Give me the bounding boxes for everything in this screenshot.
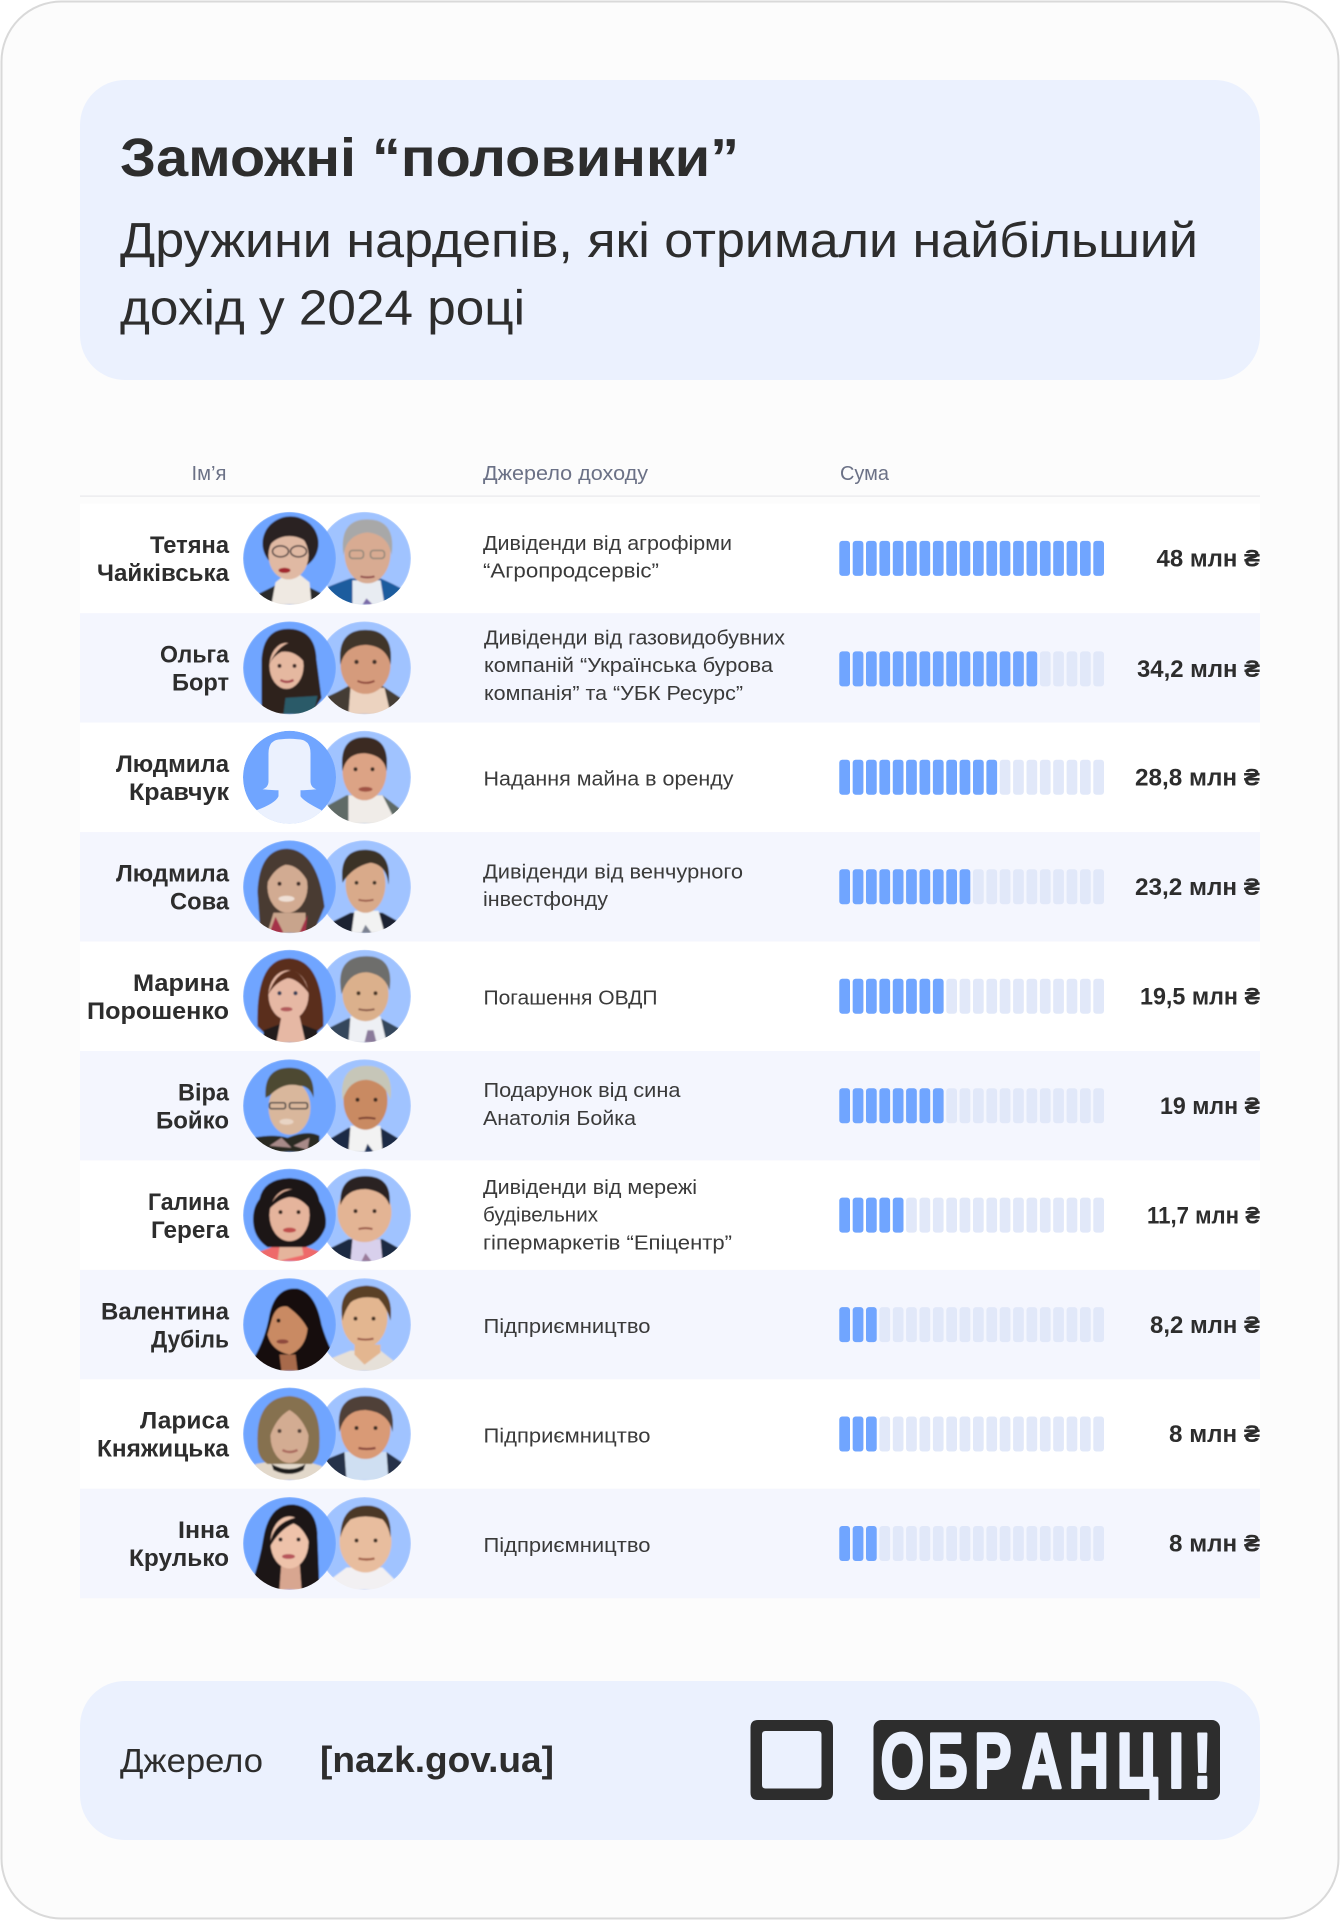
name [101,1298,229,1353]
name: Крулько [129,1545,229,1572]
name [156,1079,229,1134]
income source: “Агропродсервіс” [483,560,659,583]
portrait: wife [243,1169,336,1262]
portrait: silhouette [243,731,336,827]
portrait: wife [243,950,336,1043]
amount: 19 млн ₴ [1160,1093,1260,1120]
name [97,1408,229,1463]
income source: Дивіденди від агрофірми [483,532,732,555]
bar [839,1198,1104,1233]
row: Галина Герега [150,1168,1260,1262]
amount: 8,2 млн ₴ [1150,1312,1260,1339]
name: Герега [151,1217,229,1244]
name: Княжицька [97,1436,229,1463]
amount: 34,2 млн ₴ [1137,656,1260,683]
table header [80,463,1260,497]
income source: Дивіденди від венчурного [483,860,743,883]
income source: Надання майна в оренду [484,768,734,791]
portrait: husband [318,1497,411,1590]
bar [839,651,1104,686]
portrait: wife [243,1278,336,1371]
row: Інна Крулько [130,1497,1260,1590]
income source: компаній “Українська бурова [484,654,774,677]
name [97,532,229,587]
bar [839,1088,1104,1123]
table header: Ім’я [192,463,226,485]
bar [839,1307,1104,1342]
portrait: husband [318,1388,411,1480]
name [87,970,229,1025]
portrait: husband [318,1169,411,1262]
income source: компанія” та “УБК Ресурс” [484,682,743,705]
name: Борт [172,670,229,697]
portrait: husband [318,1278,411,1371]
name [116,751,230,806]
amount: 23,2 млн ₴ [1135,874,1260,901]
income source: Підприємництво [484,1534,650,1557]
table header: Сума [840,463,890,485]
portrait: wife [243,840,336,933]
portrait: husband [318,1059,411,1152]
table header: Джерело доходу [483,463,648,485]
portrait: husband [318,621,411,714]
name: Порошенко [87,998,229,1025]
row: Людмила Кравчук [116,730,1260,824]
income source: Дивіденди від мережі [483,1176,697,1199]
amount: 11,7 млн ₴ [1147,1202,1260,1229]
income source: Підприємництво [484,1315,650,1338]
name: Сова [170,888,229,915]
bar [839,869,1104,904]
income source [483,1176,732,1254]
icon: logo checkbox [750,1720,833,1800]
income source: Підприємництво [484,1424,650,1447]
name: Інна [178,1517,229,1544]
name [116,860,229,916]
income source: Анатолія Бойка [483,1107,637,1130]
income source [484,626,786,705]
amount: 28,8 млн ₴ [1135,764,1260,791]
title: Заможні “половинки” [120,128,739,188]
source label: Джерело [120,1742,263,1779]
name: Кравчук [129,779,230,806]
income source [483,860,743,911]
bar [839,1416,1104,1452]
name: Марина [133,970,229,997]
amount: 8 млн ₴ [1169,1421,1260,1448]
income source: Подарунок від сина [484,1079,681,1102]
amount: 48 млн ₴ [1156,546,1260,573]
portrait: husband [318,950,411,1043]
row: Марина Порошенко [88,950,1260,1043]
row: Лариса Княжицька [98,1388,1260,1480]
logo wordmark: ОБРАНЦІ! [881,1717,1212,1805]
name: Чайківська [97,560,229,587]
income source: гіпермаркетів “Епіцентр” [483,1231,732,1254]
bar [839,979,1104,1014]
name: Лариса [140,1408,229,1435]
name: Людмила [116,860,229,887]
portrait: husband [318,840,411,933]
row: Людмила Сова [116,840,1260,934]
row: Валентина Дубіль [102,1278,1260,1372]
name: Людмила [116,751,229,778]
name: Віра [178,1079,229,1106]
panel: footer [80,1681,1260,1840]
name [160,642,229,697]
row: Ольга Борт [160,621,1260,714]
portrait: wife [243,1059,336,1152]
bar [839,541,1104,576]
name: Бойко [156,1107,229,1134]
income source: інвестфонду [483,888,609,911]
subtitle: дохід у 2024 році [120,282,525,336]
name [148,1189,229,1244]
name: Тетяна [150,532,229,559]
name: Валентина [101,1298,229,1325]
row: Віра Бойко [158,1059,1260,1152]
income source [483,1079,681,1130]
bar [839,760,1104,795]
portrait: wife [243,1497,336,1590]
subtitle [120,214,1198,336]
subtitle: Дружини нардепів, які отримали найбільший [120,214,1198,268]
name: Ольга [160,642,229,669]
portrait: wife [243,512,336,605]
portrait: husband [318,731,411,824]
name: Дубіль [151,1326,229,1353]
name: Галина [148,1189,229,1216]
row: Тетяна Чайківська [98,512,1260,605]
portrait: wife [243,1388,336,1480]
amount: 19,5 млн ₴ [1140,983,1260,1010]
income source: Дивіденди від газовидобувних [484,626,786,649]
source link: [nazk.gov.ua] [320,1739,554,1780]
portrait: wife [243,621,336,714]
income source: Погашення ОВДП [484,987,658,1010]
income source: будівельних [483,1204,599,1227]
name [129,1517,229,1572]
portrait: husband [318,512,411,605]
panel: title header [80,80,1260,380]
bar [839,1526,1104,1561]
amount: 8 млн ₴ [1169,1531,1260,1558]
income source [483,532,732,583]
